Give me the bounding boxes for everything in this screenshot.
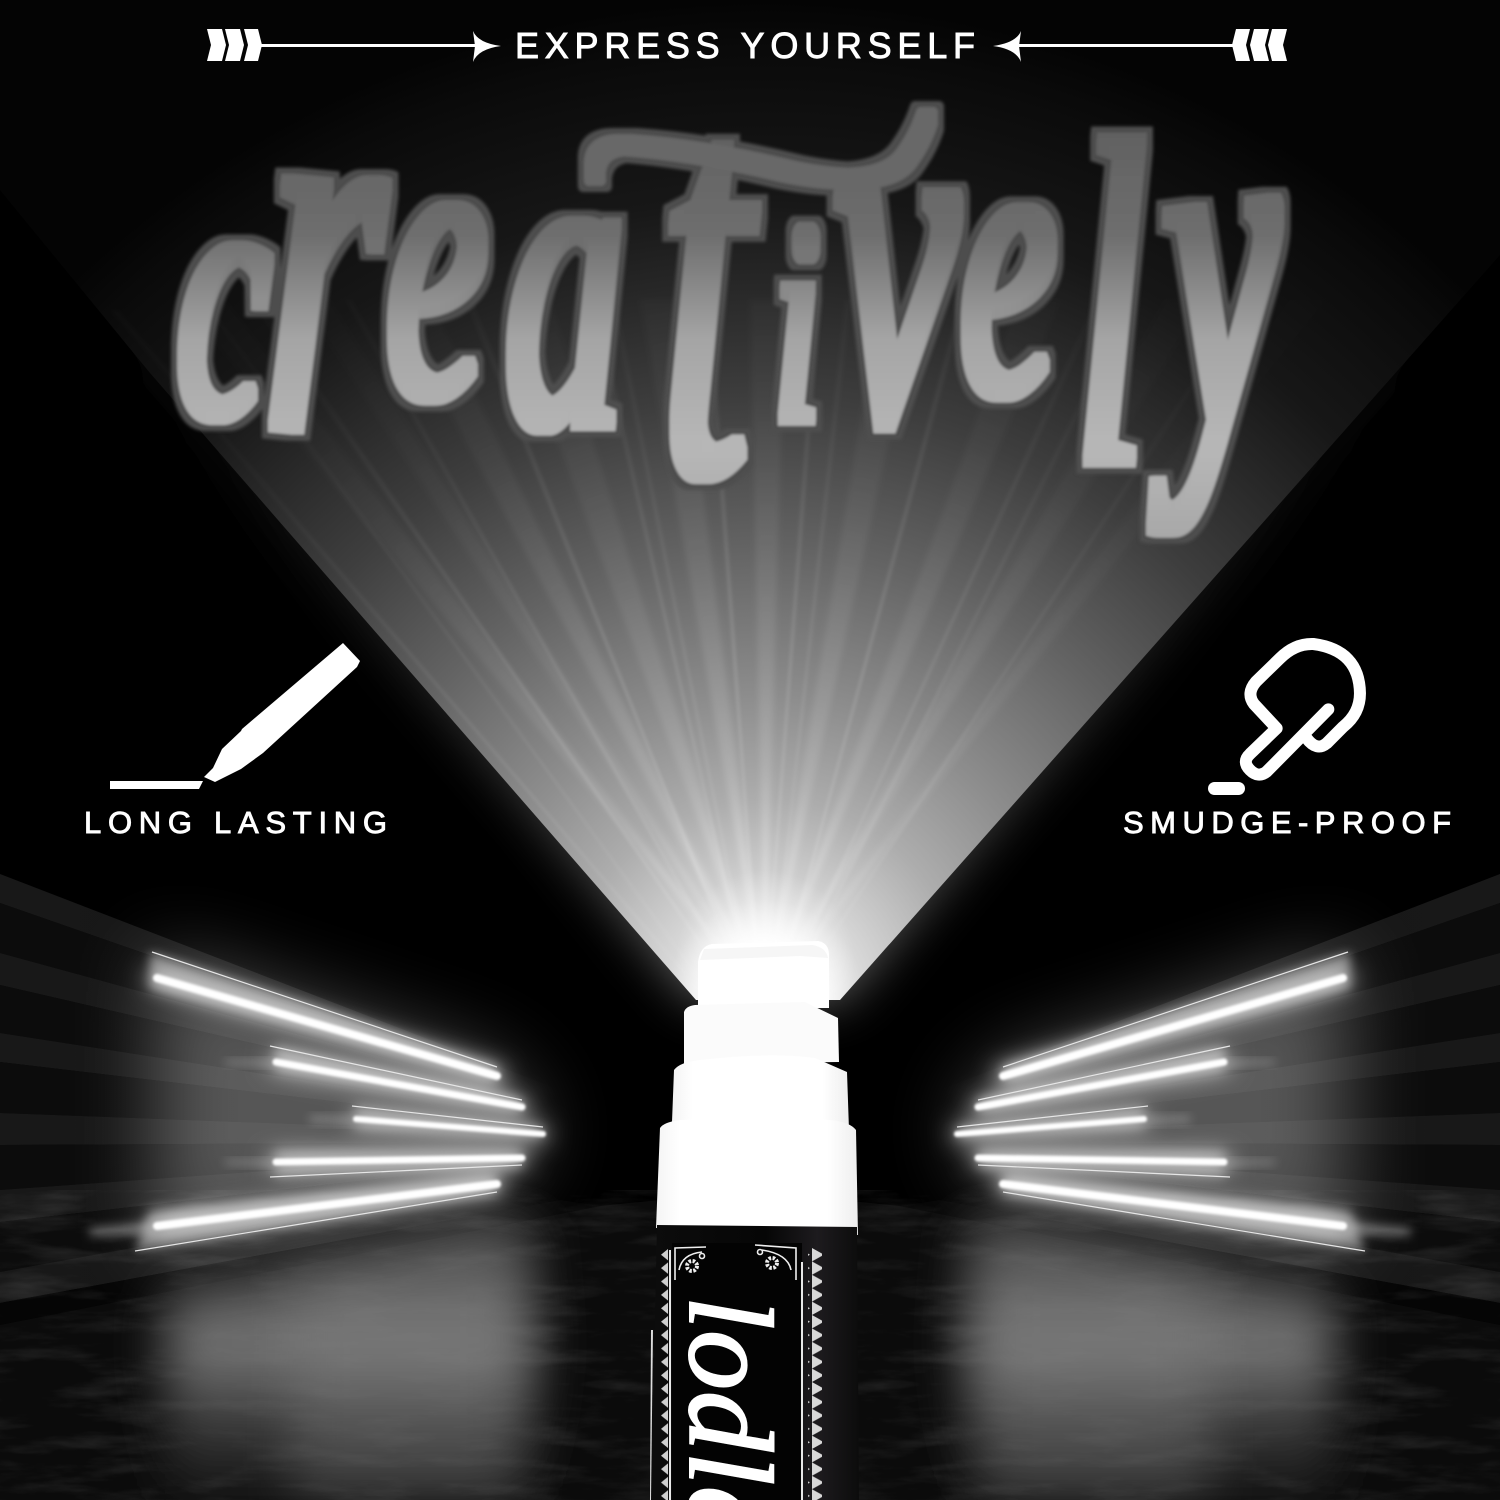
label body (651, 1225, 859, 1500)
arrow left (207, 29, 501, 62)
light beam from marker tip (96, 34, 1446, 1027)
t crossbar swash (595, 118, 927, 179)
nib collar (684, 1002, 839, 1064)
header (207, 25, 1287, 66)
chisel nib (698, 941, 829, 1008)
title lettering: creatively (172, 0, 1293, 599)
label: SMUDGE-PROOF (1123, 805, 1451, 840)
word in lettered perspective: l (1075, 48, 1147, 563)
feature: long lasting (84, 643, 387, 840)
arrow right (993, 29, 1287, 62)
label: LONG LASTING (84, 805, 387, 840)
reflective floor, right (740, 1190, 1500, 1500)
reflective floor, left (0, 1190, 760, 1500)
word in lettered perspective: e (960, 44, 1057, 478)
nib top sponge shading (700, 945, 828, 960)
word in lettered perspective: e (383, 32, 492, 487)
label rule lines (669, 1250, 803, 1500)
heading: express yourself: EXPRESS YOURSELF (515, 25, 975, 66)
word in lettered perspective: i (775, 161, 820, 483)
icon: fingertip smudge (1208, 644, 1360, 795)
tunnel wall panels, right (900, 874, 1500, 1325)
icon: marker drawing a line (110, 643, 360, 789)
word in lettered perspective (172, 0, 1293, 599)
white body edge (650, 1330, 653, 1500)
cap step (672, 1055, 849, 1130)
marker pen (650, 941, 859, 1500)
word in lettered perspective: y (1129, 0, 1293, 535)
neon light strips, left (90, 950, 543, 1251)
label ornament right (755, 1245, 796, 1280)
triangle borders (658, 1248, 822, 1500)
word in lettered perspective: c (172, 86, 277, 501)
label panel (672, 1243, 802, 1500)
word in lettered perspective: a (505, 41, 625, 519)
neon light strips, right (957, 950, 1410, 1251)
tunnel wall panels, left (0, 874, 600, 1325)
barrel collar (656, 1118, 858, 1235)
feature: smudge-proof (1123, 644, 1451, 840)
label ornament left (675, 1247, 706, 1280)
